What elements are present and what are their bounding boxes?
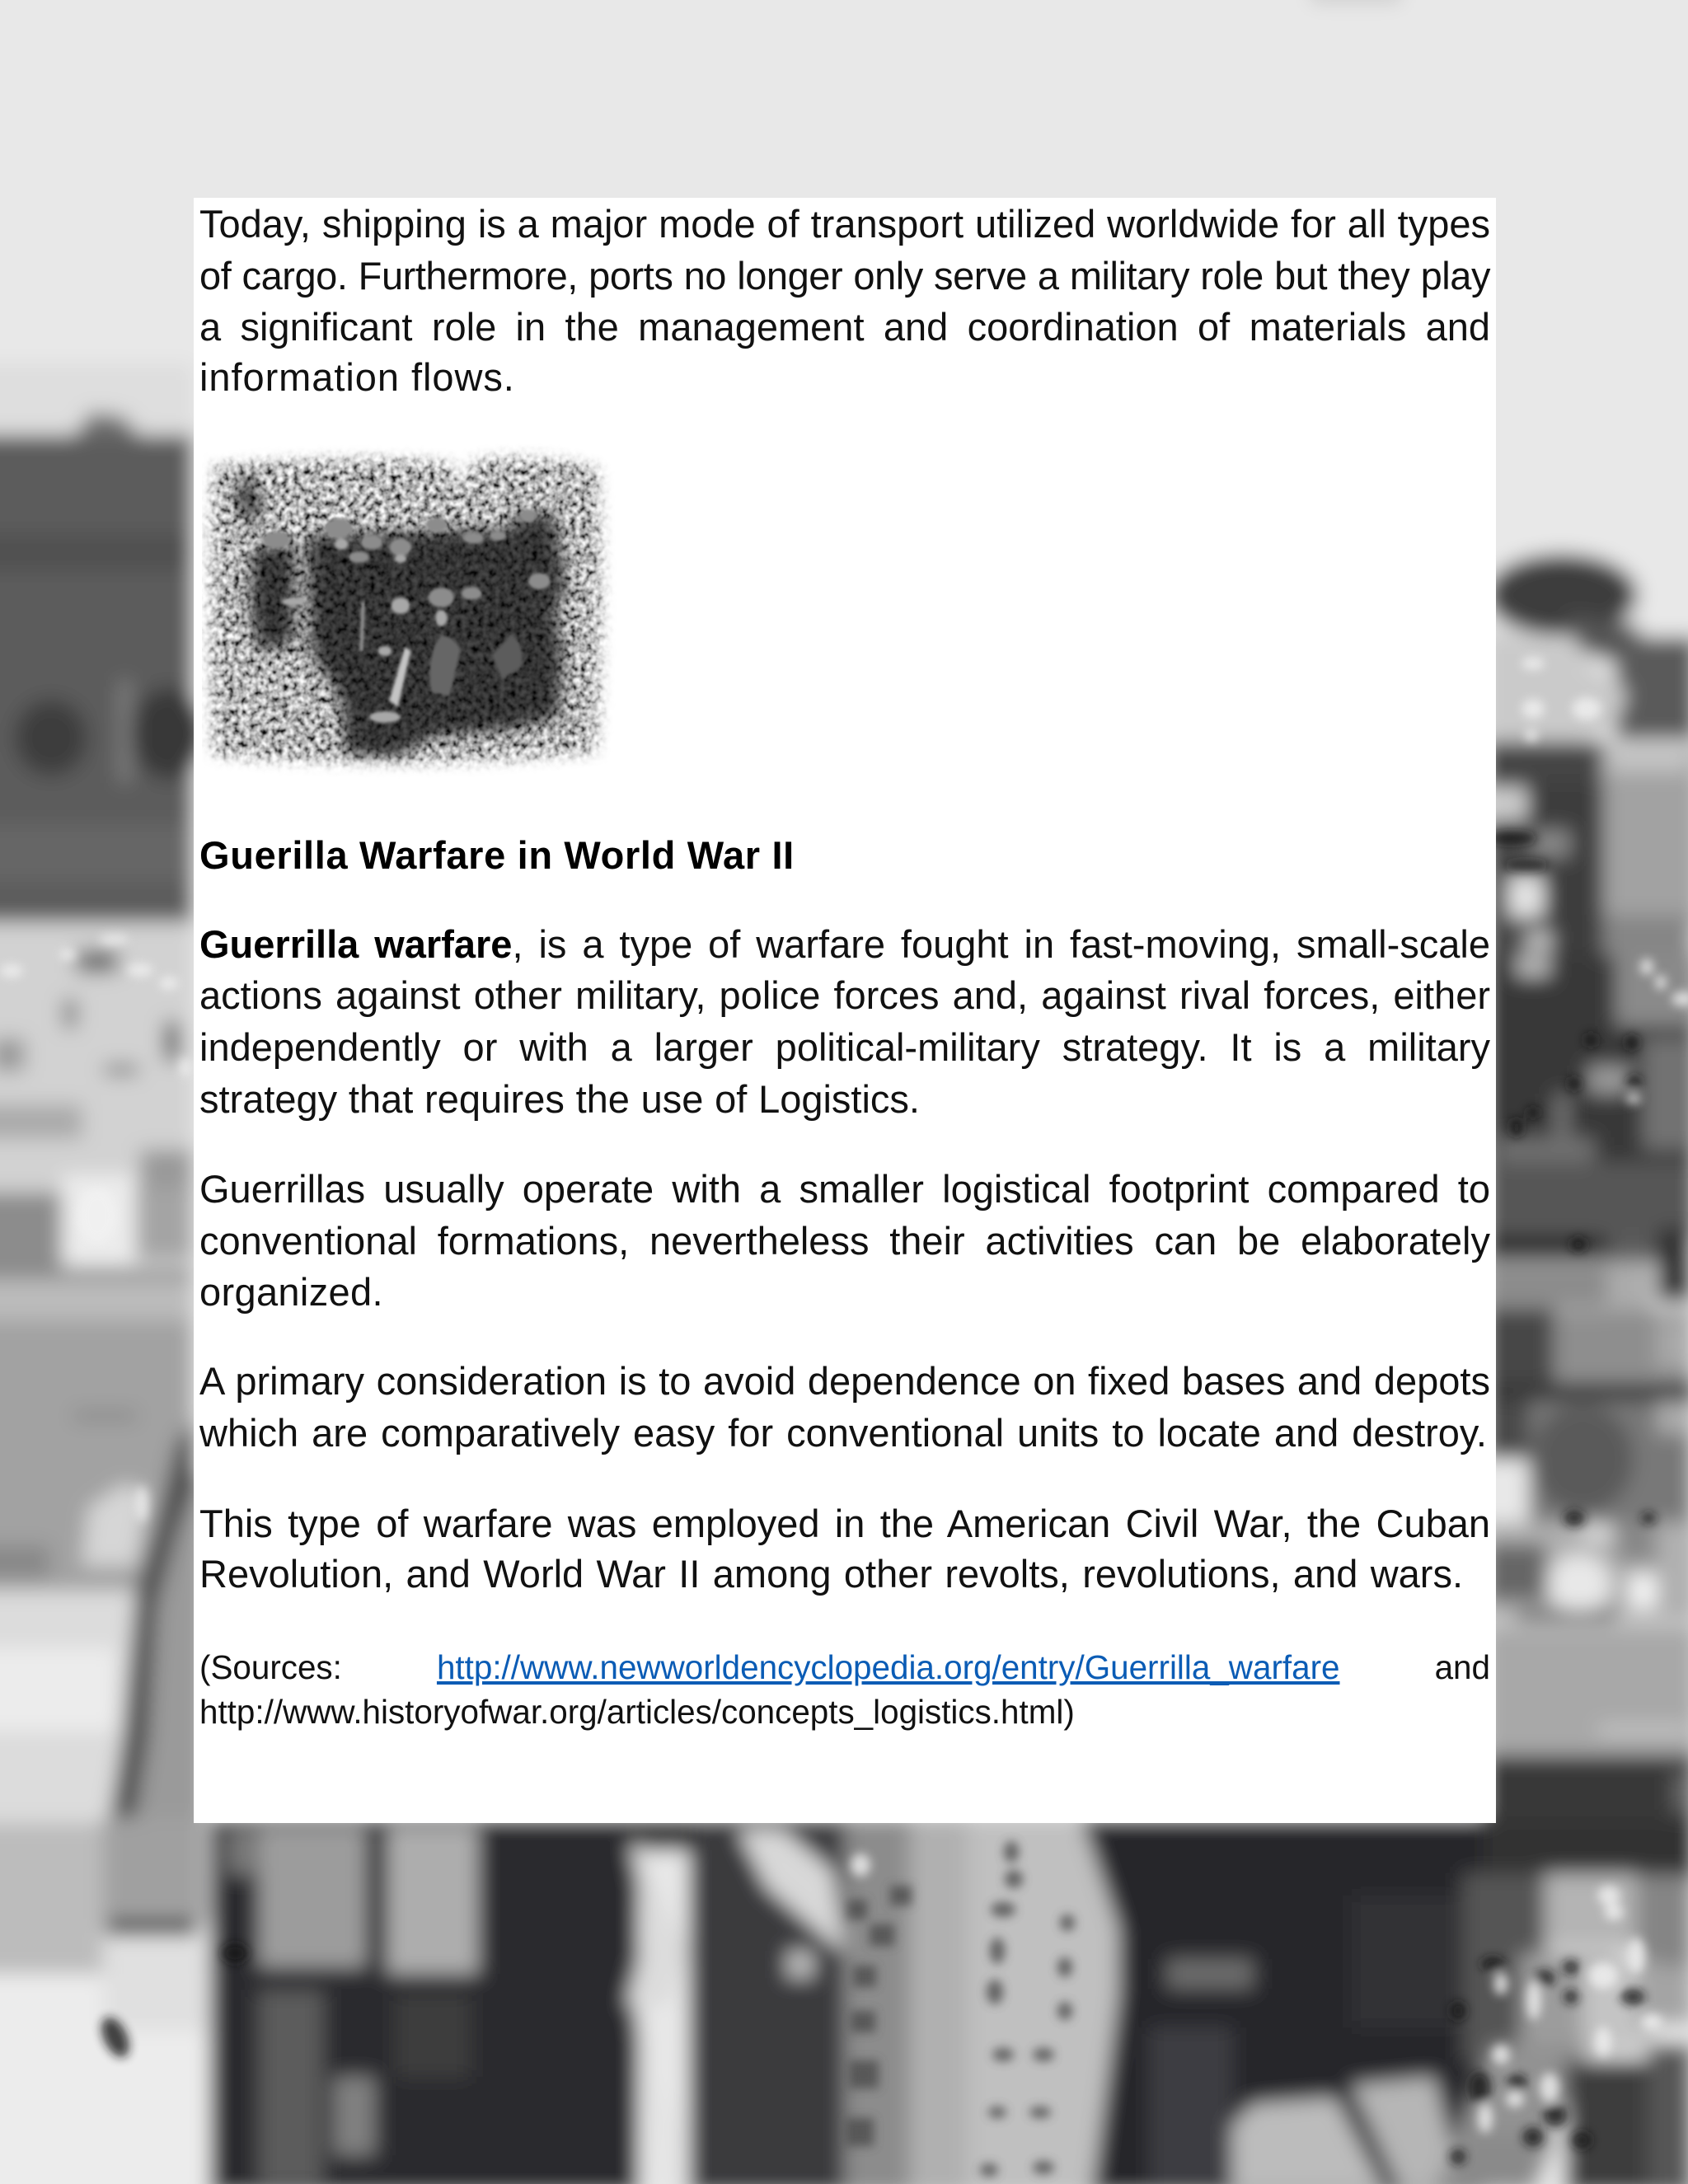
text block: guerrilla warfare definition: independently or with a larger political-military strategy. It is a military — [199, 1025, 1490, 1069]
text block: logistical footprint: conventional formations, nevertheless their activities can be elaborately — [199, 1219, 1490, 1263]
text block: logistical footprint: Guerrillas usually operate with a smaller logistical footprint compared to — [199, 1167, 1490, 1211]
text block: guerrilla warfare definition: actions against other military, police forces and, against rival forces, either — [199, 973, 1490, 1017]
text block: logistical footprint — [199, 1167, 1490, 1314]
sources: http://www.historyofwar.org/articles/concepts_logistics.html) — [199, 1693, 1075, 1731]
text block: historical uses: Revolution, and World War II among other revolts, revolutions, and wars. — [199, 1552, 1463, 1596]
text block: shipping today: information flows. — [199, 355, 515, 399]
sources — [199, 1648, 1490, 1731]
text block: shipping today: of cargo. Furthermore, ports no longer only serve a military role but they play — [199, 254, 1490, 298]
panel: text sheet — [194, 198, 1496, 1823]
photo: soldiers in jungle — [202, 448, 612, 773]
text block: fixed bases: A primary consideration is to avoid dependence on fixed bases and depots — [199, 1359, 1490, 1403]
text block: logistical footprint: organized. — [199, 1270, 383, 1314]
text block: fixed bases — [199, 1359, 1490, 1455]
helmets — [262, 509, 551, 607]
text block: guerrilla warfare definition — [199, 922, 1490, 1121]
text block: historical uses — [199, 1502, 1490, 1596]
heading: Guerilla Warfare in World War II — [199, 833, 795, 877]
text block: guerrilla warfare definition: Guerrilla warfare, is a type of warfare fought in fast-moving, small-scale — [199, 922, 1490, 966]
text block: fixed bases: which are comparatively easy for conventional units to locate and destroy. — [199, 1411, 1487, 1455]
background detail spots — [0, 657, 1688, 2177]
text block: guerrilla warfare definition: strategy that requires the use of Logistics. — [199, 1077, 920, 1121]
text block: shipping today: a significant role in the management and coordination of materials and — [199, 305, 1490, 349]
text block: historical uses: This type of warfare was employed in the American Civil War, the Cuban — [199, 1502, 1490, 1545]
left side — [0, 363, 194, 437]
text block: shipping today: Today, shipping is a major mode of transport utilized worldwide for all types — [199, 202, 1490, 246]
sources: (Sources: http://www.newworldencyclopedia.org/entry/Guerrilla_warfare and — [199, 1648, 1490, 1686]
faces and light details — [282, 538, 448, 723]
bottom — [1459, 1823, 1688, 1881]
text block: shipping today — [199, 202, 1490, 399]
right side — [1486, 554, 1638, 636]
